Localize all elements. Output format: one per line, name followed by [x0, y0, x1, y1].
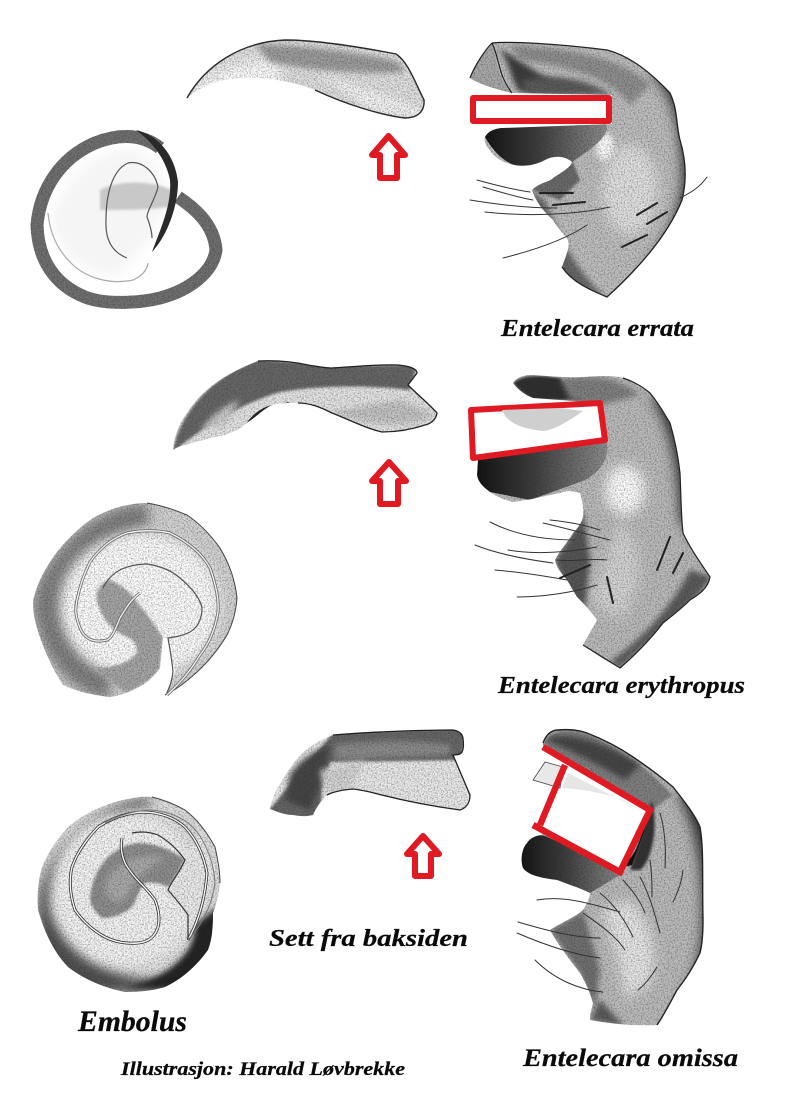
- bulb drawing: omissa: [33, 792, 225, 997]
- arrow: omissa: [407, 836, 439, 876]
- highlight box: omissa: [533, 747, 650, 872]
- embolus drawing: erythropus, back view: [170, 355, 440, 452]
- hairs: [517, 813, 683, 992]
- palpus drawing: omissa: [515, 725, 712, 1030]
- hairs: [475, 520, 683, 603]
- species name: Entelecara omissa: Entelecara omissa: [522, 1043, 738, 1072]
- species name: Entelecara erythropus: Entelecara erythropus: [497, 672, 745, 699]
- highlight box: erythropus: [471, 403, 605, 458]
- hairs: [470, 177, 707, 258]
- bulb drawing: erythropus: [28, 498, 243, 700]
- highlight box: errata: [473, 98, 609, 121]
- credit: Illustrasjon: Harald Løvbrekke: [120, 1059, 406, 1080]
- palpus drawing: errata: [465, 38, 707, 303]
- species name: Entelecara errata: Entelecara errata: [500, 315, 694, 342]
- palpus drawing: erythropus: [470, 370, 720, 670]
- caption: Sett fra baksiden: Sett fra baksiden: [269, 925, 468, 952]
- embolus drawing: omissa, back view: [270, 729, 471, 816]
- arrow: erythropus: [372, 462, 406, 504]
- bulb drawing: errata: [37, 130, 216, 302]
- label: Embolus: Embolus: [77, 1005, 187, 1038]
- embolus drawing: errata, back view: [186, 39, 425, 119]
- arrow: errata: [372, 136, 405, 178]
